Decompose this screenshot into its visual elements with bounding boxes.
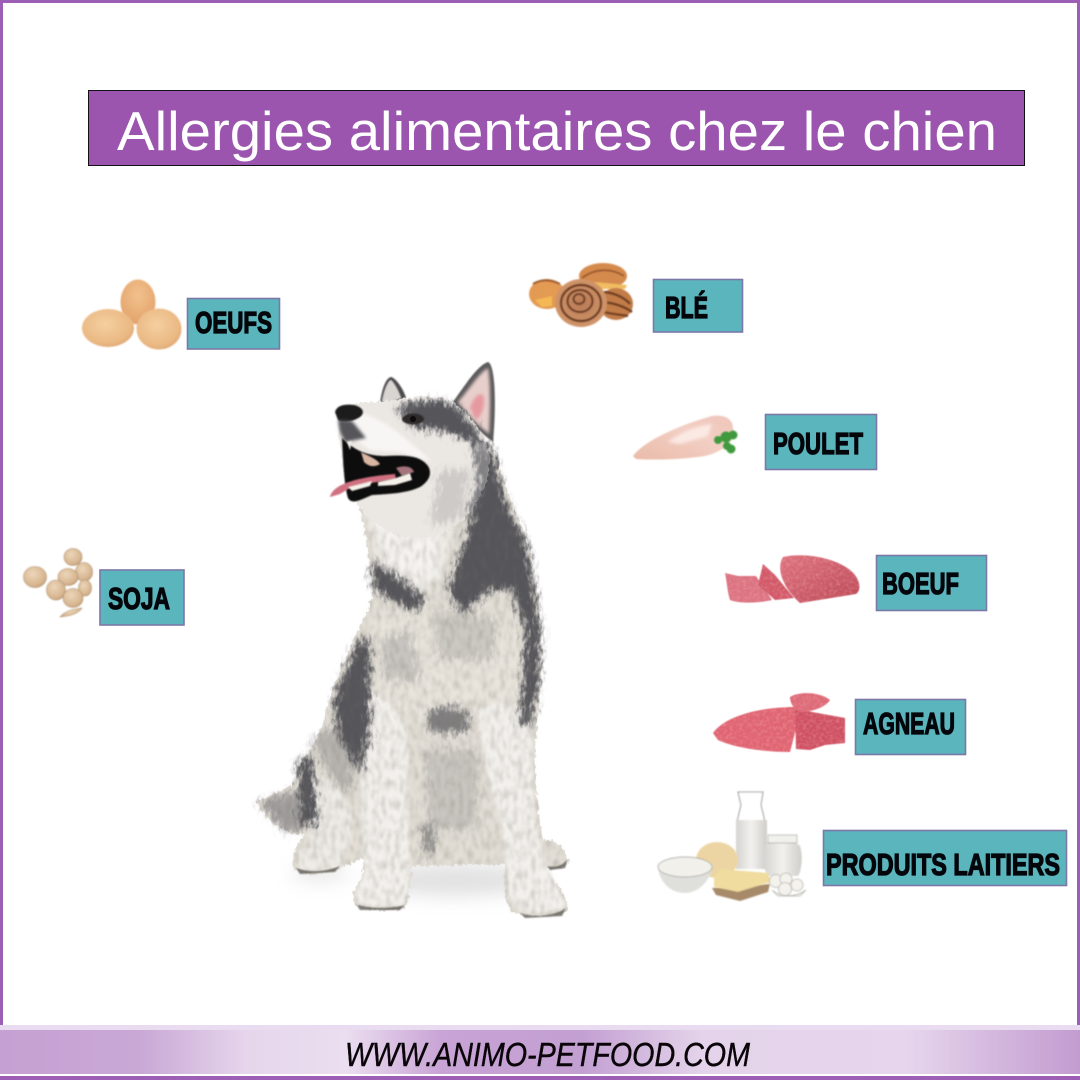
dog ear right	[453, 362, 495, 442]
dog mouth	[342, 438, 430, 501]
dog left foreleg	[356, 690, 410, 907]
bun back right	[599, 288, 633, 320]
pastry buns	[529, 263, 633, 327]
bun front	[555, 279, 607, 327]
dog nose	[335, 405, 363, 422]
parsley	[714, 430, 738, 454]
dog eye	[402, 414, 424, 424]
label: poulet	[766, 414, 876, 470]
label: agneau: AGNEAU	[863, 706, 955, 741]
dog pale chest	[372, 606, 526, 720]
dog upper teeth and palate	[347, 441, 414, 476]
label: soja: SOJA	[108, 581, 170, 616]
website url: WWW.ANIMO-PETFOOD.COM	[345, 1036, 750, 1073]
dog head	[338, 397, 490, 538]
label: boeuf	[876, 556, 986, 610]
cottage cheese bowl	[658, 857, 713, 893]
mozzarella balls	[770, 873, 806, 896]
dog coat	[256, 440, 568, 917]
eggs	[82, 280, 182, 350]
dog pale throat	[368, 510, 450, 590]
dog illustration	[256, 362, 568, 918]
label: ble	[654, 280, 742, 332]
label: oeufs: OEUFS	[195, 305, 272, 340]
dog paw shadows	[296, 860, 567, 918]
label: soja	[100, 570, 184, 625]
chicken breast	[633, 416, 738, 460]
dog pale hind legs	[298, 777, 352, 872]
beef pieces	[725, 555, 859, 603]
soy beans	[24, 548, 92, 617]
wooden board	[712, 884, 770, 901]
label: ble: BLÉ	[665, 290, 708, 325]
butter block	[714, 869, 771, 892]
bun back top	[579, 263, 627, 289]
dog body	[256, 440, 568, 917]
dog floor shadow	[290, 864, 540, 896]
dog right foreleg	[478, 703, 564, 912]
dog grey forehead	[396, 400, 495, 525]
title banner: Allergies alimentaires chez le chien	[117, 100, 997, 162]
lamb pieces	[713, 693, 845, 752]
milk jar	[763, 835, 802, 876]
label: produits laitiers	[824, 830, 1066, 886]
dog snout side	[338, 420, 366, 442]
dog ear left	[380, 377, 406, 403]
dog lower teeth	[348, 473, 412, 491]
label: boeuf: BOEUF	[882, 566, 959, 601]
footer band	[0, 1025, 1080, 1080]
dog white muzzle	[345, 412, 432, 462]
milk carafe	[736, 792, 767, 869]
label: oeufs	[188, 298, 280, 349]
bun back left	[529, 279, 565, 309]
label: agneau	[856, 700, 966, 754]
round cheese	[696, 842, 738, 878]
label: poulet: POULET	[773, 426, 863, 461]
dairy products	[658, 792, 806, 901]
dog tongue	[330, 474, 396, 497]
dog grey fur patches	[258, 440, 541, 856]
